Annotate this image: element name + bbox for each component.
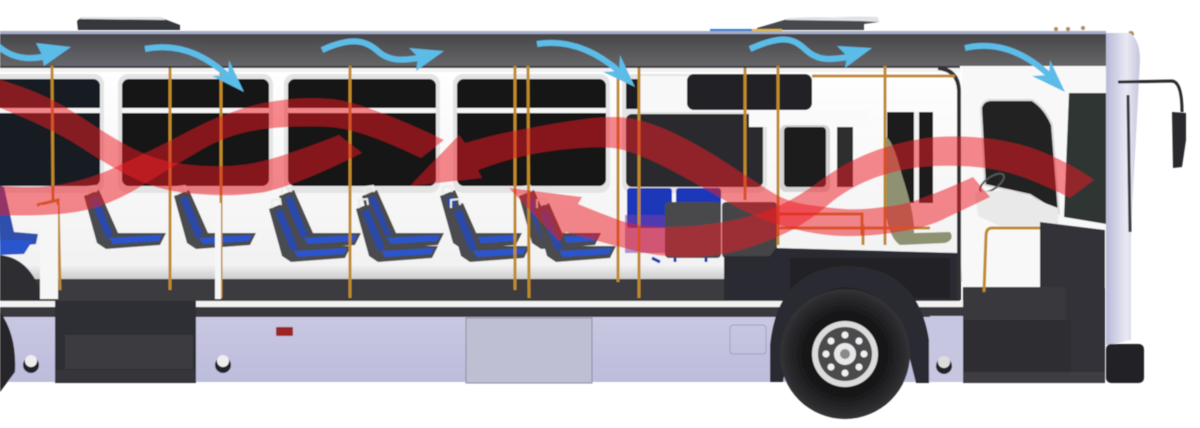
ceiling rail	[0, 68, 960, 72]
door step panel	[1040, 222, 1105, 380]
steering wheel	[977, 170, 1007, 196]
driver window	[981, 100, 1059, 213]
support columns	[40, 203, 221, 299]
mirror arm	[1118, 81, 1182, 112]
blue airflow arrows	[0, 40, 1065, 92]
door frame	[938, 68, 959, 300]
blue arrow 4	[537, 43, 635, 87]
blue arrow 5	[750, 40, 872, 68]
window: far left	[0, 74, 104, 193]
rear roof duct	[45, 34, 201, 68]
lower front body	[930, 316, 963, 382]
clearance lights	[23, 355, 952, 374]
roof band	[0, 34, 1106, 66]
rear seat and wheel housing	[0, 185, 40, 300]
front wheel housing	[724, 248, 958, 300]
destination sign	[687, 74, 812, 110]
door steps	[963, 287, 1105, 383]
red airflow arrow: driver area to centre	[410, 117, 990, 236]
access door	[730, 325, 766, 354]
roof stripe	[0, 31, 1106, 35]
window: forward pair	[749, 110, 933, 203]
side poles and rails	[37, 66, 1040, 298]
front wheel	[780, 289, 910, 419]
driver area wall	[962, 66, 1106, 288]
blue arrow 6	[965, 46, 1065, 92]
blue arrow 1	[0, 43, 71, 66]
rear wheel arc	[0, 312, 15, 392]
front blue seats	[625, 188, 777, 262]
seats	[84, 186, 616, 262]
front roof unit	[757, 17, 879, 30]
lower body	[0, 316, 963, 382]
mirror	[1172, 112, 1186, 168]
side sill stripe	[0, 301, 963, 317]
window: fifth	[622, 74, 770, 193]
interior wall	[0, 66, 1106, 282]
rear step well	[55, 301, 196, 383]
windshield	[1064, 93, 1106, 224]
window: second	[118, 74, 273, 193]
blue arrow 3	[322, 41, 444, 71]
front bumper	[1106, 344, 1144, 383]
red airflow arrow: rear seats to windshield	[509, 136, 1094, 257]
driver seat	[884, 137, 952, 245]
front fender arch	[770, 266, 929, 383]
bus front end	[1106, 33, 1140, 345]
window: third	[284, 74, 440, 193]
front end dark seam	[1128, 95, 1130, 232]
rear roof unit	[77, 17, 180, 30]
window: fourth	[453, 74, 610, 193]
red airflow arrow: lower left to centre	[0, 98, 444, 215]
blue arrow 2	[145, 47, 244, 92]
luggage panel	[466, 318, 592, 383]
marker light	[276, 327, 293, 336]
roof livery stripe	[710, 29, 782, 32]
roof marker lights	[1054, 26, 1134, 37]
red airflow arrow: upper left to centre	[0, 78, 362, 195]
floor	[0, 279, 960, 301]
dashboard	[975, 190, 1058, 226]
